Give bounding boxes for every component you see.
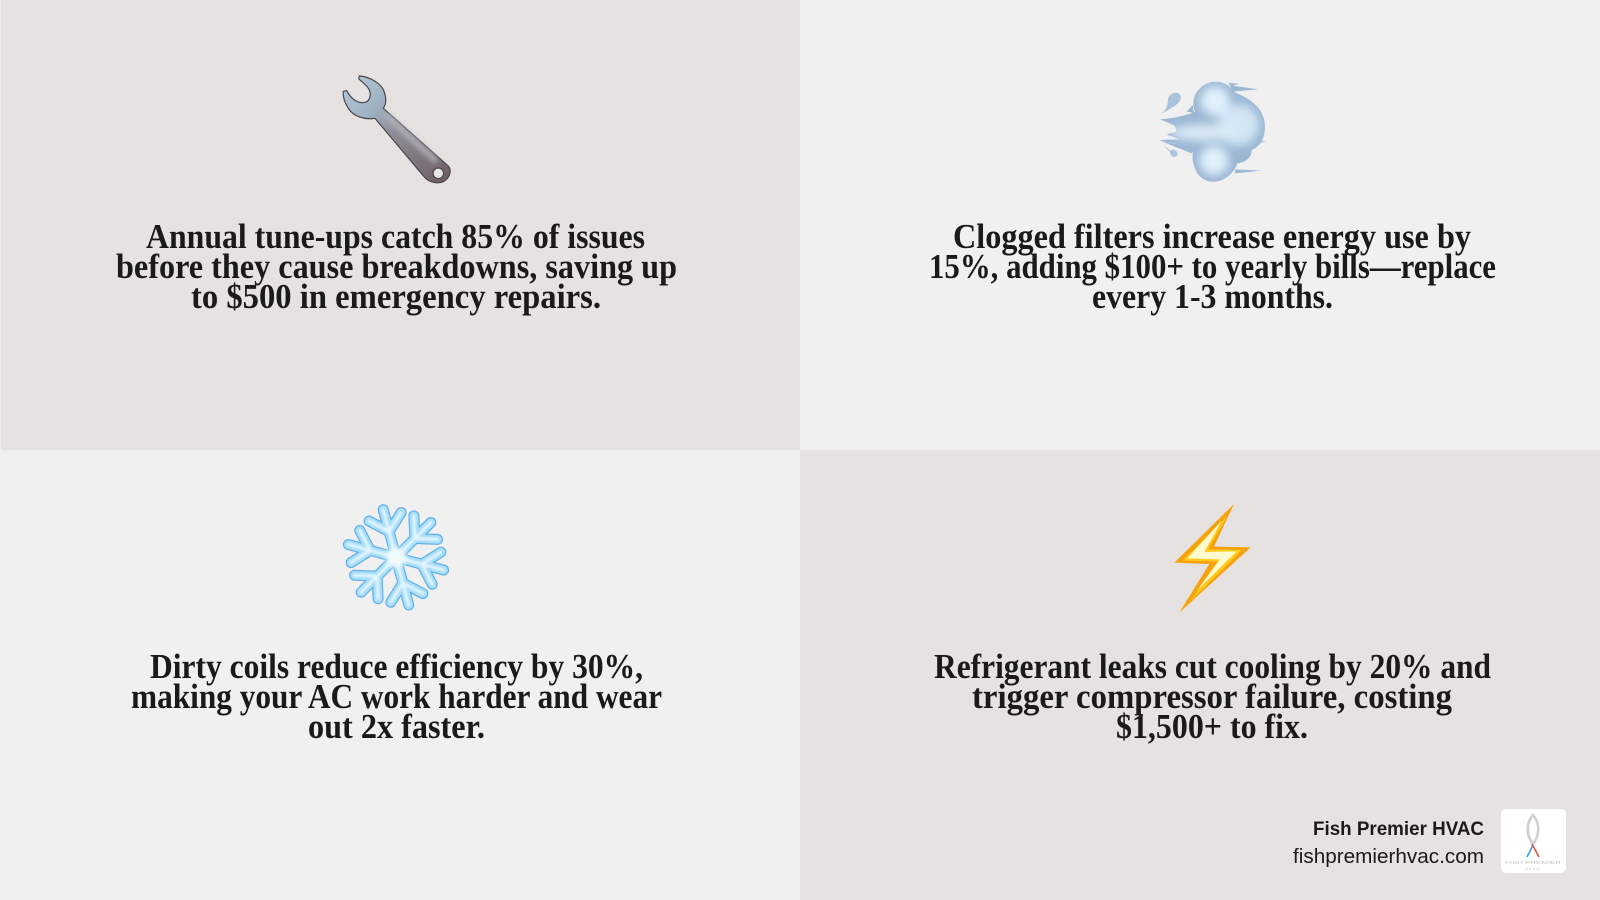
icon: lightning bolt <box>1174 504 1251 613</box>
panel: tune-ups <box>1 0 800 450</box>
text: filters: Clogged filters increase energy use by <box>953 217 1471 256</box>
icon: wrench <box>343 76 450 183</box>
text: filters: every 1-3 months. <box>1092 277 1333 316</box>
panel: coils <box>0 450 800 900</box>
text: coils: making your AC work harder and wear <box>131 677 662 716</box>
icon: snowflake <box>344 505 448 609</box>
text: coils <box>131 647 662 746</box>
text: refrigerant: trigger compressor failure, costing <box>972 677 1452 716</box>
text: filters <box>929 217 1496 316</box>
text: coils: Dirty coils reduce efficiency by 30%, <box>150 647 643 686</box>
logo: HVAC <box>1525 867 1541 871</box>
icon: wind cloud <box>1160 82 1266 182</box>
text: filters: 15%, adding $100+ to yearly bills—replace <box>929 247 1496 286</box>
panel: refrigerant <box>800 450 1600 900</box>
text: refrigerant: $1,500+ to fix. <box>1116 707 1308 746</box>
text: refrigerant: Refrigerant leaks cut cooling by 20% and <box>934 647 1491 686</box>
panel: filters <box>931 82 1496 316</box>
brand name: Fish Premier HVAC <box>1313 819 1484 840</box>
text: tune-ups: Annual tune-ups catch 85% of issues <box>146 217 645 256</box>
text: tune-ups <box>116 217 677 316</box>
text: coils: out 2x faster. <box>308 707 485 746</box>
logo <box>1501 809 1566 873</box>
text: refrigerant <box>934 647 1491 746</box>
text: tune-ups: before they cause breakdowns, saving up <box>116 247 677 286</box>
brand url: fishpremierhvac.com <box>1293 846 1484 868</box>
text: tune-ups: to $500 in emergency repairs. <box>191 277 601 316</box>
branding block <box>1293 809 1566 873</box>
logo: FISH PREMIER <box>1505 860 1562 865</box>
